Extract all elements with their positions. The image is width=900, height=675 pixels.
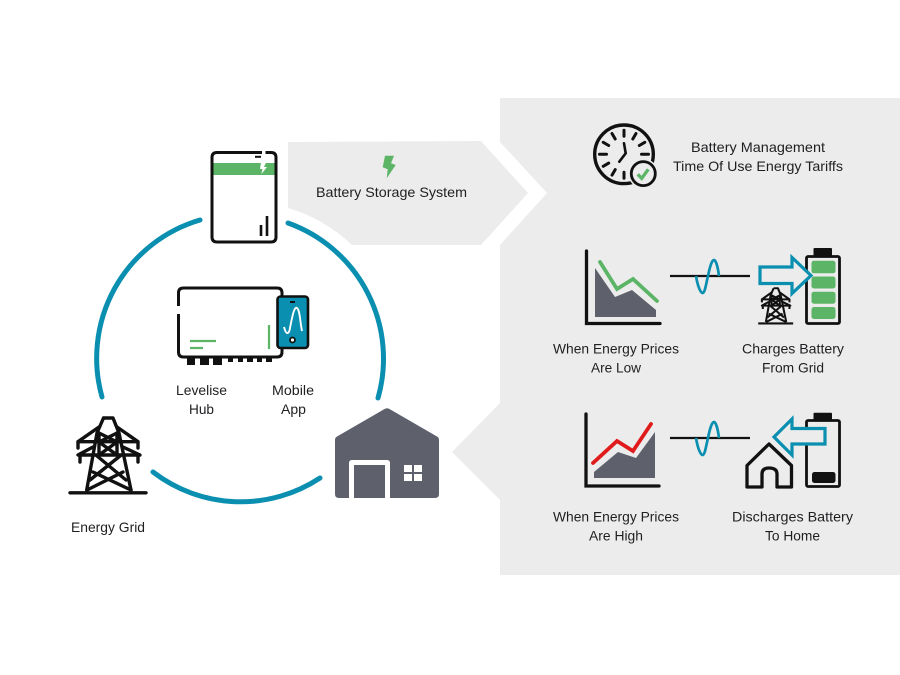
heading: battery management (673, 139, 843, 174)
label: mobile app: App (281, 401, 306, 417)
label: levelise hub (176, 382, 227, 417)
icon: low battery (806, 413, 840, 486)
label: when prices are low (553, 340, 679, 376)
arrow: discharge to home (774, 419, 825, 455)
icon: home battery unit (212, 152, 276, 242)
label: charges battery (742, 340, 844, 376)
heading: battery management: Battery Management (691, 139, 825, 155)
chart: rising prices (586, 414, 659, 486)
icon: battery storage bolt (383, 156, 396, 178)
label: when prices are low: When Energy Prices (553, 340, 679, 356)
label: battery storage system: Battery Storage System (316, 184, 467, 200)
icon: small pylon (758, 288, 793, 323)
label: when prices are high: When Energy Prices (553, 508, 679, 524)
icon: wave connector bottom (670, 422, 750, 455)
label: discharges battery: To Home (765, 528, 820, 544)
label: charges battery: From Grid (762, 360, 824, 376)
icon: small home (747, 444, 792, 487)
panel: battery management (452, 98, 900, 575)
label: levelise hub: Hub (189, 401, 214, 417)
label: when prices are high: Are High (589, 528, 643, 544)
chart: falling prices (586, 251, 660, 324)
icon: home building (335, 408, 439, 498)
label: mobile app (272, 382, 314, 417)
icon: clock with check (595, 125, 658, 189)
label: when prices are high (553, 508, 679, 544)
icon: full battery (806, 248, 840, 324)
heading: battery management: Time Of Use Energy Tariffs (673, 158, 843, 174)
panel: battery storage arrow (288, 141, 528, 245)
label: when prices are low: Are Low (591, 360, 642, 376)
label: discharges battery: Discharges Battery (732, 508, 853, 524)
label: levelise hub: Levelise (176, 382, 227, 398)
icon: mobile app phone (278, 296, 308, 348)
label: discharges battery (732, 508, 853, 544)
icon: pylon energy grid (70, 418, 146, 493)
label: charges battery: Charges Battery (742, 340, 844, 356)
icon: levelise hub (178, 288, 282, 365)
arrow: charge into battery (760, 258, 811, 294)
cycle ring (97, 220, 383, 502)
label: energy grid: Energy Grid (71, 519, 145, 535)
label: mobile app: Mobile (272, 382, 314, 398)
icon: wave connector top (670, 260, 750, 293)
